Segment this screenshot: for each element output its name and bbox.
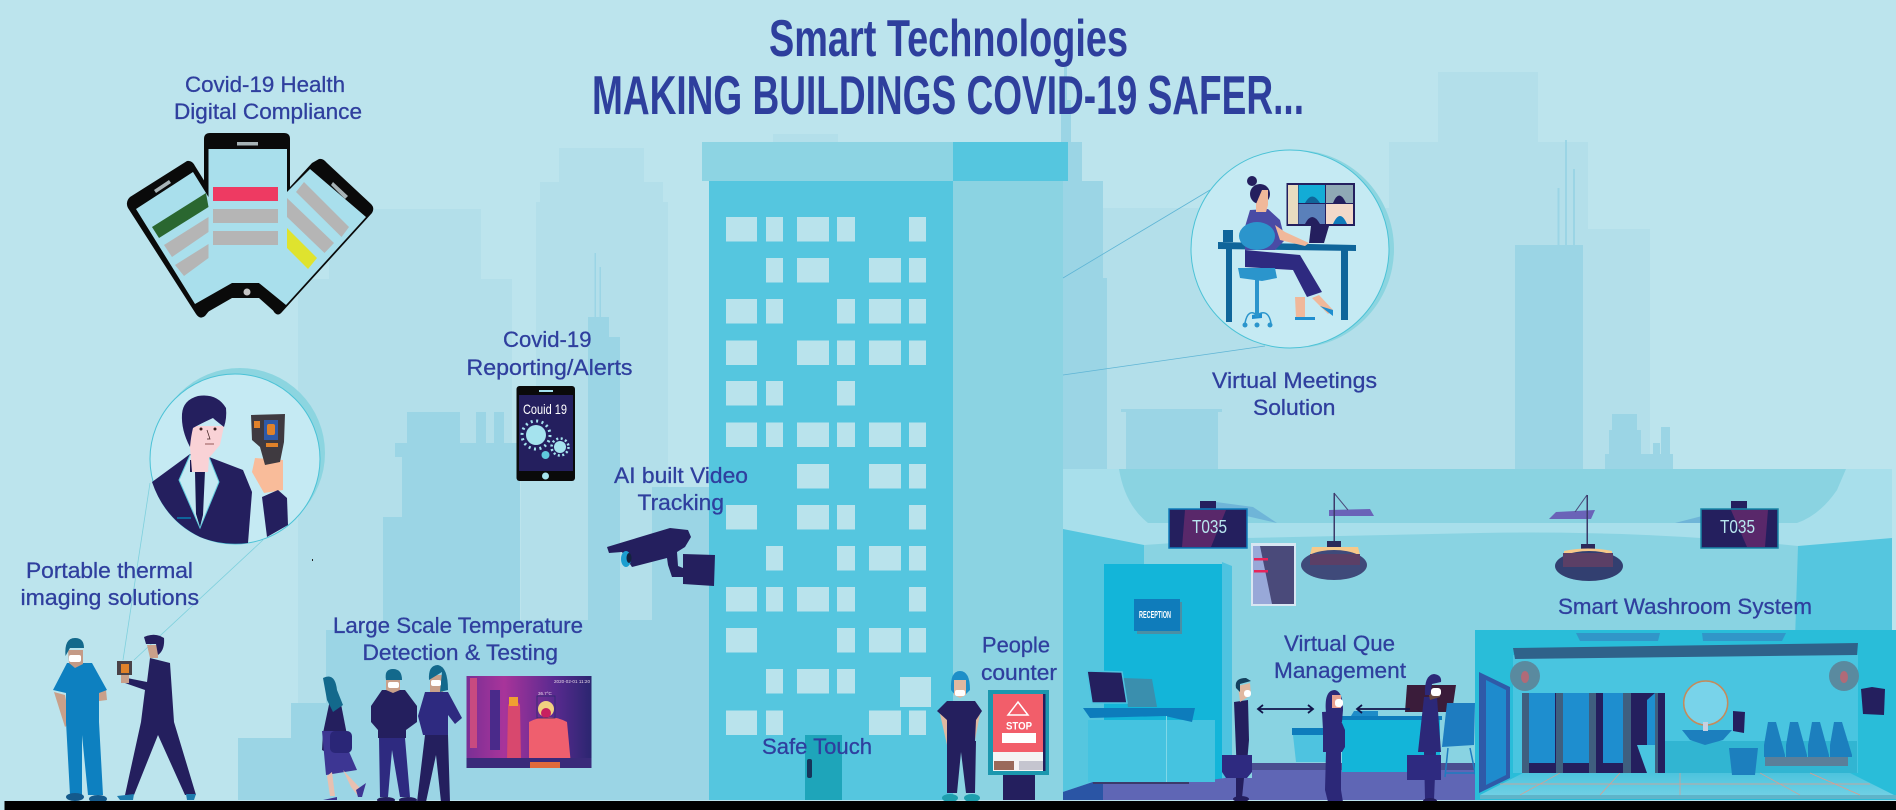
- reception sign: [1134, 599, 1182, 634]
- label: people counter: People: [982, 632, 1050, 658]
- ceiling lamp left: [1301, 493, 1374, 580]
- figure: man with thumbs up: [371, 669, 417, 803]
- thermal camera image: 36.7°C: [538, 691, 553, 696]
- figure: queue person three: [1407, 674, 1441, 804]
- panel: thermal imaging zoom circle: [150, 368, 325, 544]
- queue display left: [1169, 501, 1277, 548]
- hand dryer: [1861, 687, 1885, 715]
- label: covid-19 reporting alerts: [466, 327, 632, 380]
- mirror: [1684, 681, 1728, 725]
- label: covid-19 reporting alerts: Covid-19: [503, 327, 592, 352]
- label: portable thermal imaging solutions: imaging solutions: [20, 585, 199, 610]
- washroom shell: [1475, 630, 1896, 800]
- queue display right: [1675, 501, 1778, 548]
- jacket: [152, 454, 252, 544]
- skyline: near buildings: [238, 63, 1673, 800]
- reception sign: RECEPTION: [1139, 610, 1171, 621]
- ceiling beam and lights: [1513, 643, 1858, 659]
- label: people counter: [981, 632, 1057, 685]
- hand: [252, 458, 283, 493]
- figure: nurse: [53, 638, 107, 803]
- urinals: [1765, 757, 1848, 766]
- figure: person at counter: [937, 671, 982, 802]
- queue display left: T035: [1192, 517, 1227, 537]
- label: large scale temperature detection and testing: Detection & Testing: [362, 640, 558, 665]
- label: people counter: counter: [981, 660, 1057, 685]
- figure: queue person one: [1222, 678, 1252, 802]
- icon: three phones: [127, 133, 373, 318]
- head: [190, 426, 224, 472]
- label: covid-19 reporting alerts: Reporting/Alerts: [466, 355, 632, 380]
- bin: [1729, 748, 1758, 775]
- label: smart washroom system: Smart Washroom System: [1558, 594, 1812, 619]
- title: MAKING BUILDINGS COVID-19 SAFER...: [592, 64, 1304, 126]
- title: Smart Technologies: [769, 10, 1128, 68]
- ceiling lamp right: [1549, 495, 1623, 581]
- arrow: spacing between person one and two: [1258, 705, 1313, 713]
- back counter and chair: [1292, 685, 1476, 777]
- figure: woman walking: [322, 676, 366, 800]
- thermal camera image: [466, 676, 592, 768]
- label: safe touch: Safe Touch: [762, 734, 872, 759]
- label: covid-19 health digital compliance: Digital Compliance: [174, 99, 362, 124]
- hall interior: [1063, 469, 1892, 800]
- kiosk sign: stop: [988, 690, 1049, 800]
- label: covid-19 health digital compliance: Covid-19 Health: [185, 72, 345, 97]
- toilet stalls: [1522, 693, 1665, 773]
- label: large scale temperature detection and testing: Large Scale Temperature: [333, 613, 583, 638]
- panel: virtual meeting zoom circle: [1063, 150, 1394, 375]
- light column behind camera: [521, 470, 587, 620]
- connector lines: thermal circle: [123, 483, 263, 660]
- label: virtual que management: Management: [1274, 658, 1406, 683]
- connector lines: meeting circle: [1063, 190, 1265, 375]
- ground line: [4, 801, 1896, 810]
- label: ai built video tracking: AI built Video: [614, 463, 748, 488]
- label: portable thermal imaging solutions: [20, 558, 199, 610]
- arrow: spacing between person two and three: [1357, 705, 1410, 713]
- sink: [1682, 730, 1732, 745]
- icon: covid alert phone: [516, 386, 575, 481]
- skyline: far buildings: [298, 72, 1650, 800]
- entrance door: [1479, 672, 1510, 793]
- label: covid-19 health digital compliance: [174, 72, 362, 124]
- desk: [1218, 242, 1356, 251]
- label: ai built video tracking: Tracking: [638, 490, 724, 515]
- label: virtual meetings solution: [1212, 368, 1377, 420]
- icon: covid alert phone: Couid 19: [523, 401, 567, 417]
- label: virtual que management: [1274, 631, 1406, 683]
- title: [592, 10, 1304, 126]
- building: [702, 142, 1068, 800]
- label: large scale temperature detection and testing: [333, 613, 583, 665]
- label: ai built video tracking: [614, 463, 748, 515]
- info panel: [1251, 543, 1296, 606]
- figure: woman with mask: [411, 665, 462, 808]
- woman at desk: [1252, 313, 1262, 319]
- panel: washroom: [1475, 630, 1896, 800]
- figure: man with thermal camera: [117, 635, 196, 800]
- kiosk sign: stop: STOP: [1006, 720, 1032, 732]
- queue display right: T035: [1720, 517, 1755, 537]
- icon: door: [805, 735, 842, 800]
- icon: security camera: [607, 528, 715, 586]
- speck: [312, 559, 313, 561]
- reception desk and monitor: [1083, 671, 1215, 782]
- label: virtual que management: Virtual Que: [1284, 631, 1395, 656]
- figure: queue person two: [1322, 690, 1345, 802]
- label: portable thermal imaging solutions: Portable thermal: [26, 558, 193, 583]
- thermal camera image: 2020-02-01 11:20: [554, 679, 590, 684]
- chair: [1239, 222, 1275, 250]
- soap dispenser: [1733, 711, 1745, 733]
- video call monitor: [1286, 183, 1355, 226]
- hall upper wall: [1063, 469, 1892, 800]
- sleeve: [262, 490, 288, 537]
- thermal camera: [251, 414, 285, 465]
- label: virtual meetings solution: Solution: [1253, 395, 1336, 420]
- label: virtual meetings solution: Virtual Meetings: [1212, 368, 1377, 393]
- building side face: [953, 181, 1063, 800]
